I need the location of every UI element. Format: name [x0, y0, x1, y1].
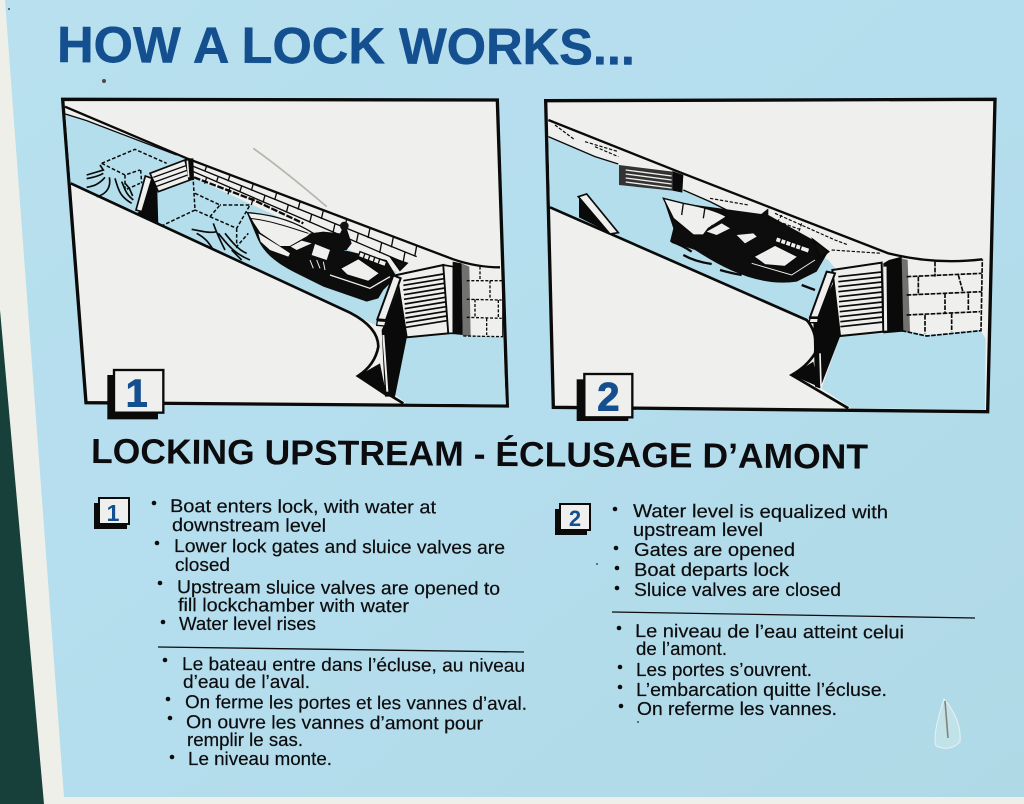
- step 1 French text: On ouvre les vannes d’amont pour: [186, 711, 483, 734]
- step 1 English text: downstream level: [172, 514, 326, 536]
- right wall bricks: [902, 259, 982, 336]
- step 2 French text: Les portes s’ouvrent.: [636, 659, 812, 680]
- step 2 bullets: [613, 507, 623, 708]
- number badge 2: 2: [597, 376, 619, 420]
- step 2 English text: [633, 500, 888, 600]
- lock wall: [190, 159, 453, 272]
- step 1 English text: Lower lock gates and sluice valves are: [174, 535, 505, 558]
- step 1 English text: fill lockchamber with water: [178, 594, 409, 616]
- lower basin water: [393, 333, 506, 404]
- number badge 2: [577, 374, 632, 421]
- lock wall: [548, 120, 982, 261]
- panel: step 1 diagram: [63, 99, 507, 419]
- lower gate: [792, 257, 910, 388]
- step 2 French text: On referme les vannes.: [637, 698, 837, 719]
- right wall bricks: [463, 267, 503, 337]
- water channel: [548, 137, 837, 320]
- step 2 English text: upstream level: [633, 519, 763, 540]
- step 2 French text: de l’amont.: [636, 638, 727, 659]
- boat: [663, 198, 828, 290]
- step 2 French text: L’embarcation quitte l’écluse.: [636, 679, 887, 700]
- step 2 French text: [635, 620, 904, 719]
- land edge: [71, 183, 403, 403]
- step 2 English text: Sluice valves are closed: [634, 579, 841, 600]
- step 2 English text: Gates are opened: [634, 539, 795, 560]
- step 1 English text: [170, 495, 505, 634]
- dark green post: [0, 310, 44, 804]
- upper gate: [619, 165, 672, 191]
- wall bricks: [193, 166, 417, 263]
- step 2 English text: Water level is equalized with: [633, 500, 888, 522]
- step 1 French text: On ferme les portes et les vannes d’aval.: [185, 691, 527, 714]
- title: HOW A LOCK WORKS...: [57, 16, 635, 76]
- small number badge 2: 2: [569, 506, 581, 531]
- step 1 French text: d’eau de l’aval.: [183, 671, 310, 692]
- number badge 1: [107, 370, 163, 419]
- step 1 divider: [158, 647, 524, 652]
- text block: step 1 instructions: [94, 495, 527, 769]
- step 2 English text: Boat departs lock: [634, 559, 790, 580]
- small number badge 1: 1: [107, 500, 120, 526]
- panel: step 2 diagram: [546, 99, 995, 421]
- small number badge 1: [94, 498, 129, 529]
- step 1 French text: Le bateau entre dans l’écluse, au niveau: [182, 653, 525, 676]
- step 1 English text: closed: [175, 554, 230, 575]
- scratch on panel: [253, 148, 327, 207]
- subheading: LOCKING UPSTREAM - ÉCLUSAGE D’AMONT: [91, 431, 868, 477]
- land edge: [550, 207, 848, 408]
- step 1 French text: remplir le sas.: [187, 729, 303, 750]
- step 2 divider: [612, 612, 975, 618]
- dashed sluice outlines: [102, 149, 250, 247]
- step 2 French text: Le niveau de l’eau atteint celui: [635, 620, 904, 642]
- water channel: [65, 114, 397, 327]
- step 1 bullets: [152, 501, 174, 759]
- screw mark on sign: [935, 699, 960, 748]
- step 1 English text: Upstream sluice valves are opened to: [177, 576, 500, 599]
- open upper leaf: [579, 197, 609, 233]
- upper gate: [150, 160, 190, 192]
- step 1 French text: [182, 653, 527, 769]
- water jets: [87, 165, 250, 260]
- specks on sign: [8, 8, 639, 723]
- step 1 English text: Boat enters lock, with water at: [170, 495, 436, 517]
- panel frame: [63, 99, 507, 406]
- panel frame: [546, 99, 995, 412]
- lower gate: [357, 262, 471, 397]
- step 1 English text: Water level rises: [179, 613, 316, 634]
- small number badge 2: [555, 504, 590, 535]
- boat: [247, 213, 407, 302]
- step 1 French text: Le niveau monte.: [188, 748, 332, 769]
- text block: step 2 instructions: [555, 500, 975, 719]
- lower basin water: [822, 330, 986, 409]
- number badge 1: 1: [126, 371, 148, 415]
